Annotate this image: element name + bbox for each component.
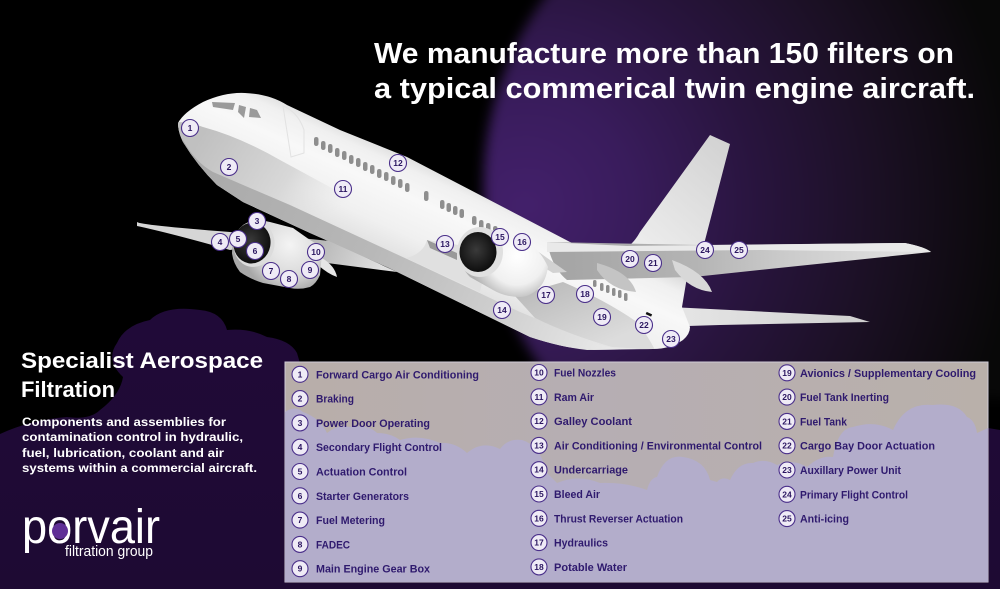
cockpit windscreen: [212, 102, 261, 118]
nose underside: [178, 122, 324, 232]
item 1: 1: [298, 369, 303, 379]
item 6: 6: [298, 491, 303, 501]
thrust reverser fairing: [533, 248, 567, 273]
item 8: [292, 536, 350, 552]
item 12: Galley Coolant: [554, 416, 632, 428]
title: [374, 38, 975, 105]
item 9: 9: [298, 564, 303, 574]
marker 12: 12: [393, 158, 403, 168]
marker 13: 13: [440, 239, 450, 249]
marker 22: [636, 316, 652, 334]
marker 13: [436, 236, 454, 252]
marker 7: 7: [269, 266, 274, 276]
fuselage shading: [176, 122, 655, 356]
item 9: Main Engine Gear Box: [316, 564, 431, 576]
item 13: Air Conditioning / Environmental Control: [554, 440, 762, 452]
marker 25: [730, 242, 748, 258]
item 6: Starter Generators: [316, 491, 409, 503]
item 9: [292, 561, 431, 577]
airplane illustration: [137, 93, 931, 356]
item 2: 2: [298, 394, 303, 404]
item 20: Fuel Tank Inerting: [800, 392, 889, 404]
item 25: [779, 511, 849, 527]
item 10: [531, 364, 616, 380]
item 4: 4: [298, 442, 303, 452]
marker 14: 14: [497, 305, 507, 315]
item 11: Ram Air: [554, 392, 595, 404]
item 3: 3: [298, 418, 303, 428]
description text: systems within a commercial aircraft.: [22, 461, 257, 475]
item 5: [292, 464, 407, 480]
marker 20: 20: [625, 254, 635, 264]
item 3: Power Door Operating: [316, 418, 430, 430]
item 22: [779, 438, 935, 454]
item 24: 24: [782, 489, 792, 499]
item 11: [531, 389, 595, 405]
item 3: [292, 415, 430, 431]
marker 11: [334, 180, 352, 198]
marker 25: 25: [734, 245, 744, 255]
marker 10: 10: [311, 247, 321, 257]
marker 16: [514, 234, 530, 250]
legend column 3: [779, 365, 976, 527]
item 14: 14: [534, 465, 544, 475]
description text: contamination control in hydraulic,: [22, 430, 243, 444]
marker 15: [492, 228, 508, 246]
legend column 1: [292, 366, 479, 577]
marker 1: [182, 120, 198, 136]
title: a typical commerical twin engine aircraft.: [374, 73, 975, 105]
marker 8: [280, 270, 298, 288]
item 17: [531, 535, 608, 551]
item 18: Potable Water: [554, 562, 628, 574]
item 5: Actuation Control: [316, 466, 407, 478]
logo: porvair filtration group: filtration group: [65, 544, 153, 560]
marker 7: [262, 262, 280, 280]
belly band: [183, 140, 650, 356]
plane number markers: [182, 120, 748, 348]
marker 11: 11: [338, 184, 348, 194]
item 4: [292, 439, 442, 455]
item 2: Braking: [316, 394, 354, 406]
description text: Components and assemblies for: [22, 415, 226, 429]
marker 9: [302, 262, 318, 278]
item 20: [779, 389, 889, 405]
marker 22: 22: [639, 320, 649, 330]
far wing outer: [137, 222, 300, 250]
item 12: 12: [534, 416, 544, 426]
marker 15: 15: [495, 232, 505, 242]
main wing: [547, 242, 931, 280]
fuselage: [178, 93, 690, 350]
marker 3: 3: [255, 216, 260, 226]
item 19: Avionics / Supplementary Cooling: [800, 368, 976, 380]
item 11: 11: [534, 392, 544, 402]
marker 23: 23: [666, 334, 676, 344]
item 16: [531, 510, 683, 526]
marker 19: [594, 308, 610, 326]
marker 19: 19: [597, 312, 607, 322]
marker 2: 2: [227, 162, 232, 172]
item 22: 22: [782, 441, 792, 451]
far engine lip: [230, 218, 278, 270]
marker 1: 1: [188, 123, 193, 133]
panel cloud overlay: [285, 404, 988, 582]
item 15: 15: [534, 489, 544, 499]
item 17: 17: [534, 538, 544, 548]
wing flap fairing 1: [597, 263, 636, 292]
item 23: 23: [782, 465, 792, 475]
wing fairing: [416, 240, 479, 282]
panel: numbered legend: [285, 362, 988, 582]
marker 5: 5: [236, 234, 241, 244]
heading: specialist aerospace filtration: Filtration: [21, 377, 115, 402]
logo: porvair filtration group: porvair: [22, 501, 160, 554]
item 24: Primary Flight Control: [800, 489, 908, 501]
item 25: 25: [782, 514, 792, 524]
heading: specialist aerospace filtration: [21, 348, 263, 402]
marker 6: [246, 242, 264, 260]
description text: [22, 415, 257, 475]
item 21: 21: [782, 416, 792, 426]
item 7: [292, 512, 385, 528]
item 18: 18: [534, 562, 544, 572]
item 1: [292, 366, 479, 382]
dark purple clouds: [0, 309, 1000, 589]
marker 21: [644, 254, 662, 272]
item 8: 8: [298, 539, 303, 549]
marker 6: 6: [253, 246, 258, 256]
marker 8: 8: [287, 274, 292, 284]
marker 4: 4: [218, 237, 223, 247]
marker 24: [696, 242, 714, 258]
marker 3: [248, 212, 266, 230]
marker 23: [662, 330, 680, 348]
item 14: [531, 462, 628, 478]
marker 10: [308, 244, 324, 260]
marker 18: 18: [580, 289, 590, 299]
item 4: Secondary Flight Control: [316, 442, 442, 454]
purple sky glow: [484, 0, 1000, 400]
item 15: [531, 486, 601, 502]
marker 17: [538, 286, 554, 304]
near engine intake: [460, 232, 496, 272]
far engine nacelle: [232, 221, 322, 289]
marker 21: 21: [648, 258, 658, 268]
rear underside grey zone: [515, 282, 655, 350]
marker 9: 9: [308, 265, 313, 275]
item 13: 13: [534, 440, 544, 450]
near engine lip: [457, 227, 503, 277]
marker 12: [390, 154, 406, 172]
item 22: Cargo Bay Door Actuation: [800, 441, 935, 453]
item 7: 7: [298, 515, 303, 525]
legend column 2: [531, 364, 762, 575]
wing leading edge strip: [547, 242, 931, 252]
marker 5: [230, 230, 246, 248]
marker 24: 24: [700, 245, 710, 255]
wing flap fairing 2: [672, 260, 712, 292]
far wing flap fairing: [318, 258, 337, 277]
item 19: 19: [782, 368, 792, 378]
marker 17: 17: [541, 290, 551, 300]
lower tail stabilizer: [670, 307, 870, 326]
marker 14: [494, 302, 510, 318]
item 1: Forward Cargo Air Conditioning: [316, 369, 479, 381]
vertical tail fin: [627, 135, 730, 248]
marker 2: [220, 158, 238, 176]
item 23: [779, 462, 901, 478]
item 17: Hydraulics: [554, 538, 608, 550]
item 12: [531, 413, 632, 429]
item 18: [531, 559, 628, 575]
item 8: FADEC: [316, 539, 350, 551]
item 21: [779, 413, 848, 429]
forward door: [283, 106, 304, 157]
marker 20: [622, 250, 638, 268]
item 23: Auxillary Power Unit: [800, 465, 901, 477]
item 19: [779, 365, 976, 381]
description text: fuel, lubrication, coolant and air: [22, 446, 224, 460]
item 13: [531, 437, 762, 453]
item 16: 16: [534, 513, 544, 523]
marker 16: 16: [517, 237, 527, 247]
marker 4: [212, 234, 228, 250]
title: We manufacture more than 150 filters on: [374, 38, 954, 70]
item 15: Bleed Air: [554, 489, 601, 501]
item 2: [292, 391, 354, 407]
heading: specialist aerospace filtration: Specialist Aerospace: [21, 348, 263, 373]
item 7: Fuel Metering: [316, 515, 385, 527]
near engine nacelle: [460, 228, 548, 297]
item 14: Undercarriage: [554, 465, 628, 477]
item 25: Anti-icing: [800, 514, 849, 526]
passenger windows: [314, 137, 628, 301]
item 21: Fuel Tank: [800, 416, 848, 428]
item 10: Fuel Nozzles: [554, 368, 616, 380]
far wing inner: [300, 238, 397, 272]
item 6: [292, 488, 409, 504]
marker 18: [576, 286, 594, 302]
tail vent: [646, 312, 652, 317]
item 5: 5: [298, 466, 303, 476]
item 16: Thrust Reverser Actuation: [554, 513, 683, 525]
item 24: [779, 486, 908, 502]
wing box wedge: [427, 240, 457, 260]
item 20: 20: [782, 392, 792, 402]
item 10: 10: [534, 368, 544, 378]
far engine intake: [230, 220, 274, 266]
